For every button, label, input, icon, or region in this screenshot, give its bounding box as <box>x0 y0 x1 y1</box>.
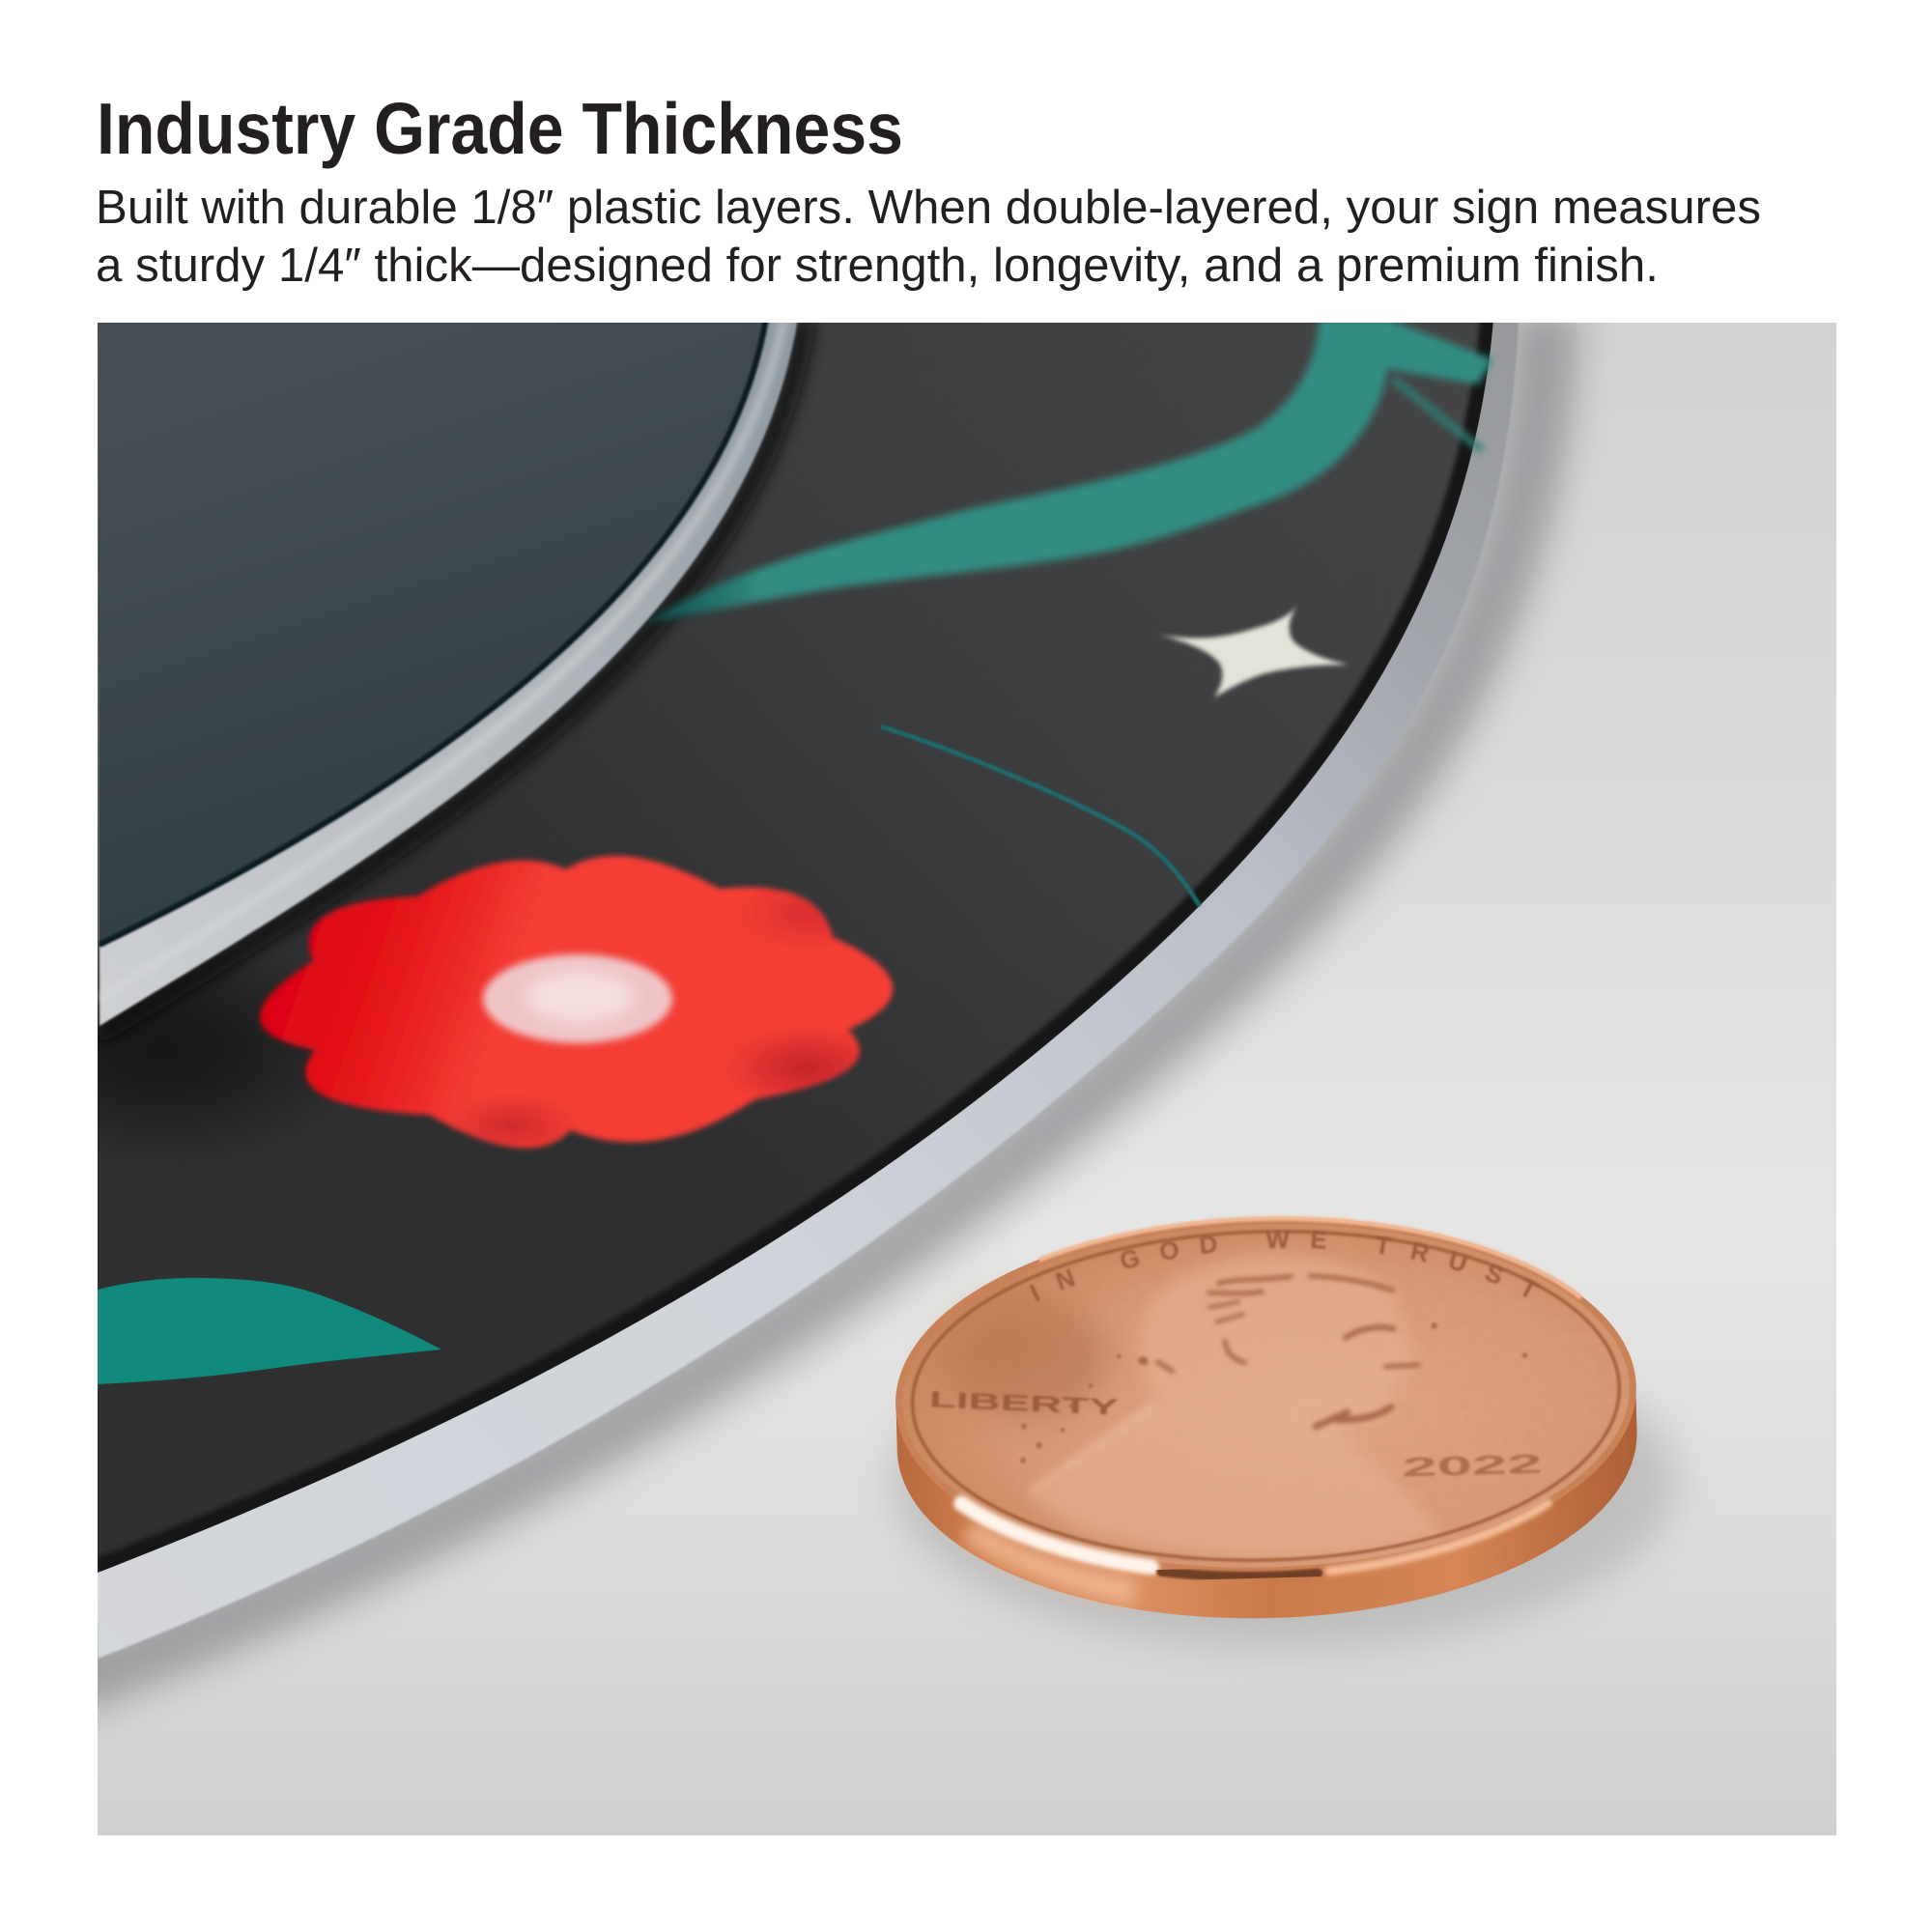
photo: sign layers beside a penny <box>98 323 1836 1835</box>
coin side <box>896 1386 1641 1628</box>
dark shadow left of flower <box>98 971 307 1138</box>
inner disc rim highlight <box>99 319 784 999</box>
face grain <box>892 1209 1640 1582</box>
white four-point star <box>1159 606 1350 697</box>
coin inscriptions: 2022 <box>1402 1449 1543 1482</box>
Lincoln portrait <box>1015 1248 1533 1566</box>
bust edge highlight <box>1029 1404 1159 1492</box>
coin inscriptions: LIBERTY <box>928 1386 1119 1420</box>
coin inscriptions <box>931 1231 1541 1478</box>
penny <box>895 1215 1637 1619</box>
inner blue-grey disc <box>98 319 766 947</box>
title: Industry Grade Thickness <box>97 88 903 169</box>
patina patch <box>944 1298 1111 1419</box>
teal stem with leaves <box>645 319 1493 623</box>
inner disc contact shadow <box>98 319 806 1036</box>
body text <box>96 182 1761 292</box>
speckles <box>1017 1320 1530 1463</box>
body text: a sturdy 1/4″ thick—designed for strength, longevity, and a premium finish. <box>96 240 1659 292</box>
side highlight glow <box>969 1525 1135 1597</box>
shadow under the sign <box>58 309 1546 1686</box>
teal leaf <box>98 1278 441 1384</box>
rim highlights <box>961 1488 1549 1584</box>
coin rim <box>895 1209 1637 1580</box>
darker petals <box>762 894 829 937</box>
coin inscriptions: IN GOD WE TRUST <box>1030 1231 1538 1302</box>
inner disc dark edge <box>99 319 766 945</box>
dark bevel along disc edge <box>98 319 1489 1567</box>
body text: Built with durable 1/8″ plastic layers. When double-layered, your sign measures <box>96 182 1761 234</box>
grain <box>98 323 1498 1578</box>
red flower <box>255 852 897 1152</box>
large black printed disc <box>0 319 1498 1578</box>
inner disc white edge <box>98 319 798 1026</box>
white plastic edge of large disc <box>98 319 1519 1659</box>
tabletop background <box>98 323 1836 1835</box>
flower centre <box>483 954 672 1043</box>
thin teal line <box>881 726 1200 906</box>
hair and facial strokes <box>1138 1273 1420 1431</box>
coin shadow <box>894 1319 1676 1647</box>
coin face <box>892 1209 1640 1582</box>
